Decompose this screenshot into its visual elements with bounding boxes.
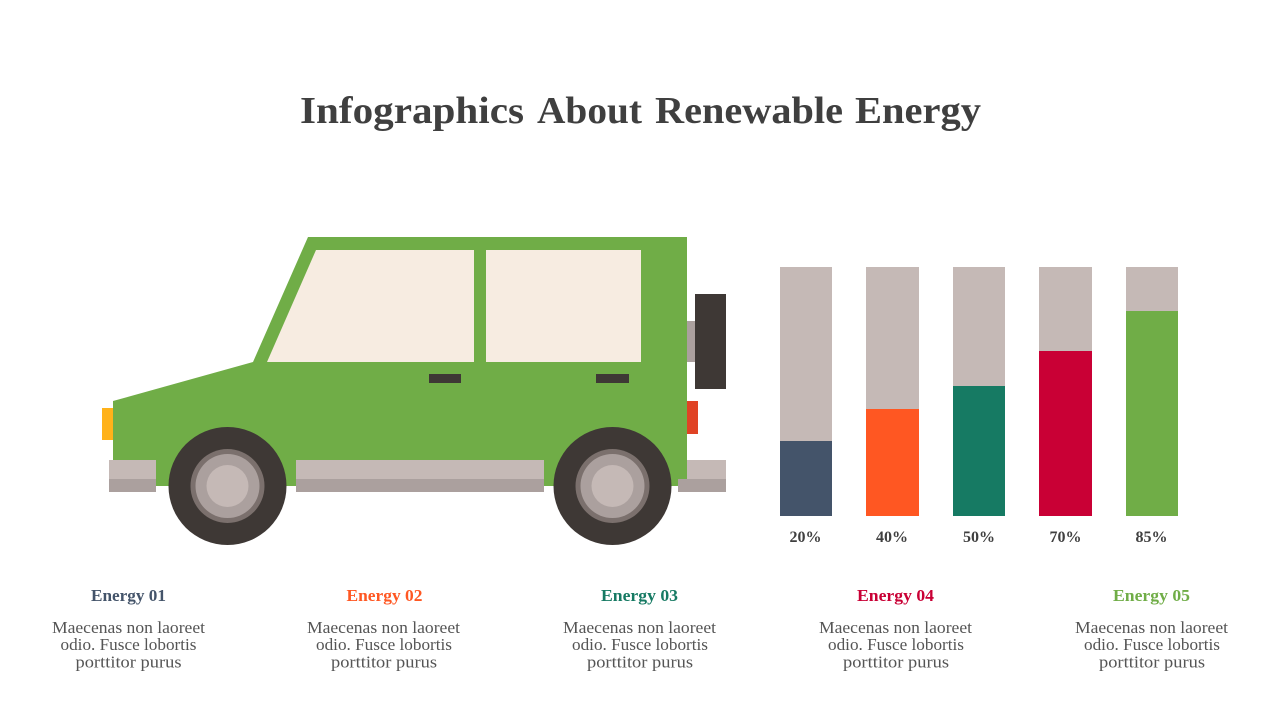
text block: Energy 01: Maecenas non laoreet <box>52 618 205 637</box>
icon: spare wheel <box>695 294 726 389</box>
bar chart <box>780 267 1178 546</box>
text block: Energy 01: Energy 01 <box>91 586 166 605</box>
front window <box>267 250 474 362</box>
bar: 70%: 70% <box>1050 529 1082 546</box>
rear window <box>486 250 641 362</box>
bar: 85% <box>1126 267 1178 546</box>
text block: Energy 03: Maecenas non laoreet <box>563 618 716 637</box>
bar: 40% <box>866 267 919 546</box>
bar: 85%: 85% <box>1136 529 1168 546</box>
side skirt <box>296 460 544 492</box>
title: Renewable <box>655 90 843 132</box>
text block: Energy 05 <box>1075 586 1228 672</box>
icon: front wheel <box>168 427 286 545</box>
text block: Energy 03: odio. Fusce lobortis <box>572 635 708 654</box>
text block: Energy 03: Energy 03 <box>601 586 678 605</box>
text block: Energy 02 <box>307 586 460 672</box>
text block: Energy 04: Energy 04 <box>857 586 934 605</box>
text block: Energy 02: odio. Fusce lobortis <box>316 635 452 654</box>
rear bumper <box>678 460 726 492</box>
icon: rear light <box>687 401 698 434</box>
text block: Energy 02: Maecenas non laoreet <box>307 618 460 637</box>
text block: Energy 03 <box>563 586 716 672</box>
text block: Energy 05: Maecenas non laoreet <box>1075 618 1228 637</box>
text block: Energy 01: porttitor purus <box>76 652 182 672</box>
illustration: green car <box>102 237 726 545</box>
front bumper <box>109 460 156 492</box>
text block: Energy 04: Maecenas non laoreet <box>819 618 972 637</box>
icon: front indicator light <box>102 408 113 440</box>
text block: Energy 05: odio. Fusce lobortis <box>1084 635 1220 654</box>
rear door handle <box>596 374 629 383</box>
car body <box>113 237 687 486</box>
text block: Energy 04 <box>819 586 972 672</box>
title: Energy <box>855 90 981 132</box>
text block: Energy 05: Energy 05 <box>1113 586 1190 605</box>
front door handle <box>429 374 461 383</box>
spare wheel bracket <box>687 321 695 362</box>
text block: Energy 04: odio. Fusce lobortis <box>828 635 964 654</box>
text block: Energy 01 <box>52 586 205 672</box>
text block: Energy 04: porttitor purus <box>843 652 949 672</box>
bar: 70% <box>1039 267 1092 546</box>
bar: 50%: 50% <box>963 529 995 546</box>
icon: rear wheel <box>554 427 672 545</box>
text block: Energy 02: Energy 02 <box>346 586 422 605</box>
text block: Energy 02: porttitor purus <box>331 652 437 672</box>
bar: 20%: 20% <box>790 529 822 546</box>
title: About <box>537 90 642 132</box>
bar: 40%: 40% <box>876 529 908 546</box>
title: Infographics <box>300 90 524 132</box>
text block: Energy 03: porttitor purus <box>587 652 693 672</box>
text block: Energy 01: odio. Fusce lobortis <box>60 635 196 654</box>
bar: 50% <box>953 267 1005 546</box>
bar: 20% <box>780 267 832 546</box>
text block: Energy 05: porttitor purus <box>1099 652 1205 672</box>
